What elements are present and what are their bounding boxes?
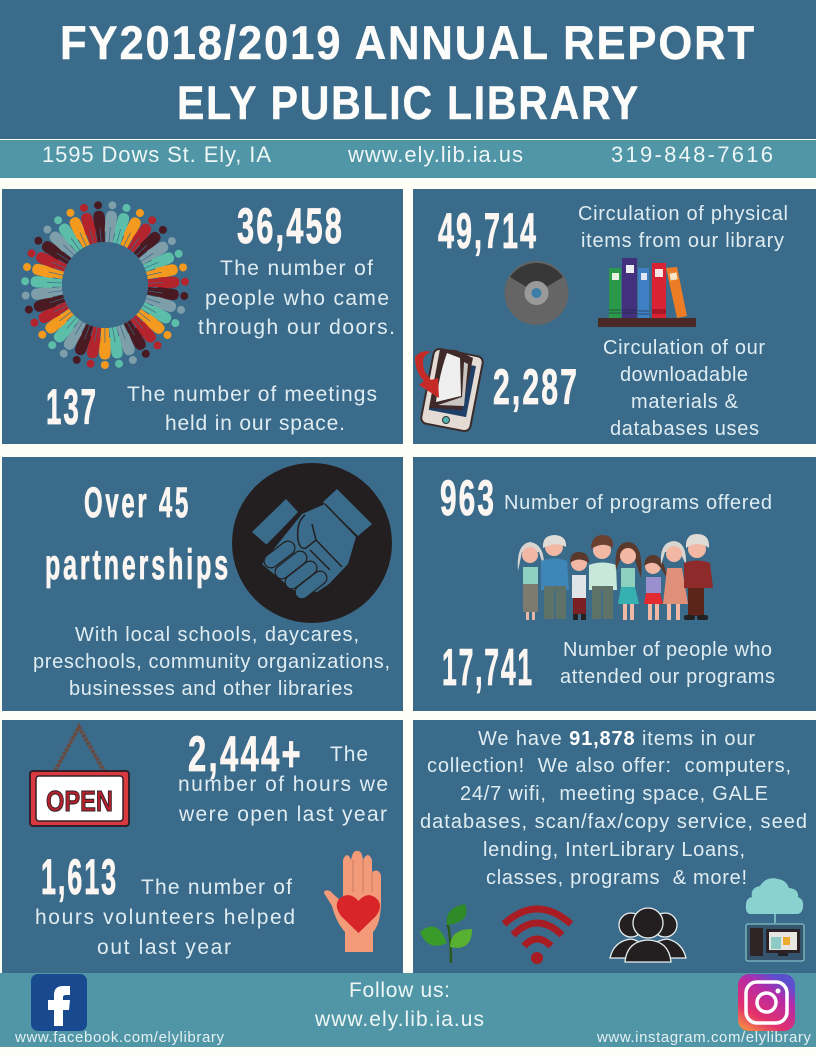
grandfather left	[541, 535, 569, 619]
text: volunteer hours description: The number of	[141, 876, 292, 899]
boy	[570, 552, 589, 620]
text: partnerships description: With local schools, daycares,	[75, 624, 359, 646]
stat: 963: 963	[440, 470, 496, 526]
grandmother right	[661, 541, 688, 620]
text: volunteer hours description: out last year	[97, 936, 231, 959]
text: meetings description: held in our space.	[165, 412, 345, 435]
text: facebook url: www.facebook.com/elylibrary	[14, 1029, 224, 1046]
icon: seedling	[420, 904, 472, 963]
title line 2: ELY PUBLIC LIBRARY	[177, 76, 640, 129]
text: open hours description: The	[330, 743, 368, 766]
heading: Over 45: Over 45	[84, 479, 191, 527]
panel: programs	[413, 457, 816, 711]
text: meetings description: The number of meetings	[127, 383, 377, 406]
text: downloadable description: Circulation of our	[603, 337, 765, 359]
icon: disc	[504, 261, 568, 325]
icon: facebook	[31, 974, 87, 1031]
text: collection description: classes, programs & more!	[486, 867, 747, 889]
text: visitors description: The number of	[220, 257, 373, 280]
icon: group of people	[610, 908, 686, 962]
text: collection description: lending, InterLibrary Loans,	[483, 839, 745, 861]
phone: 319-848-7616	[611, 142, 773, 167]
text: downloadable description: materials &	[631, 391, 739, 413]
mother	[616, 542, 641, 620]
stat: 137: 137	[46, 379, 98, 435]
text: attendance description: attended our programs	[560, 666, 775, 688]
text: volunteer hours description	[35, 876, 295, 959]
stat: 36,458: 36,458	[237, 198, 344, 254]
stat: 49,714: 49,714	[438, 203, 538, 259]
website: www.ely.lib.ia.us	[347, 142, 523, 167]
header banner	[0, 0, 816, 139]
clasped hands	[262, 504, 357, 592]
grandmother left	[518, 542, 544, 620]
text: collection description: We have 91,878 items in our	[478, 728, 755, 750]
icon: handshake	[232, 463, 392, 623]
text: downloadable description: databases uses	[610, 418, 759, 440]
text: physical circulation	[578, 203, 788, 252]
text: visitors description: through our doors.	[198, 316, 395, 339]
text: visitors description: people who came	[205, 287, 389, 310]
icon: instagram	[738, 974, 795, 1031]
icon: open sign: OPEN	[46, 786, 113, 818]
stat: 1,613: 1,613	[41, 849, 118, 905]
text: collection description: collection! We also offer: computers,	[427, 755, 791, 777]
address: 1595 Dows St. Ely, IA	[42, 142, 271, 167]
icon: cloud computer	[746, 878, 804, 961]
icon: family group	[518, 534, 713, 620]
text: visitors description	[198, 257, 395, 339]
text: partnerships description	[33, 624, 390, 700]
father	[589, 535, 617, 619]
text: partnerships description: businesses and other libraries	[69, 678, 353, 700]
text: programs offered: Number of programs offered	[504, 492, 772, 514]
text: follow us: Follow us:	[349, 979, 450, 1002]
panel: visitors and meetings	[2, 189, 403, 444]
text: collection description: databases, scan/fax/copy service, seed	[420, 811, 807, 833]
text: attendance description	[560, 639, 775, 688]
text: attendance description: Number of people who	[563, 639, 772, 661]
panel: hours	[2, 720, 403, 973]
text: downloadable description	[603, 337, 765, 440]
panel: partnerships	[2, 457, 403, 711]
icon: books on shelf	[598, 258, 696, 327]
icon: ring of people	[21, 201, 189, 369]
text: instagram url: www.instagram.com/elylibrary	[596, 1029, 812, 1046]
stat: 17,741: 17,741	[442, 639, 534, 697]
title line 1: FY2018/2019 ANNUAL REPORT	[60, 16, 756, 69]
text: website: www.ely.lib.ia.us	[314, 1008, 484, 1031]
stat: 2,444+: 2,444+	[188, 726, 303, 782]
girl	[644, 555, 668, 620]
footer band	[0, 973, 816, 1047]
text: collection description: 24/7 wifi, meeting space, GALE	[460, 783, 768, 805]
icon: hand with heart	[324, 851, 381, 952]
text: partnerships description: preschools, community organizations,	[33, 651, 390, 673]
text: volunteer hours description: hours volunteers helped	[35, 906, 295, 929]
heading: partnerships: partnerships	[45, 541, 231, 589]
right cuff	[323, 489, 372, 536]
text: downloadable description: downloadable	[620, 364, 748, 386]
text: collection description	[420, 728, 807, 889]
text: physical circulation: items from our library	[581, 230, 784, 252]
text: open hours description: were open last year	[178, 803, 387, 826]
contact band	[0, 140, 816, 178]
icon: wifi	[504, 909, 571, 964]
icon: tablet with book	[415, 348, 484, 432]
grandfather right	[684, 534, 713, 620]
icon: open sign	[30, 727, 129, 826]
text: open hours description	[178, 743, 388, 826]
left cuff	[252, 499, 298, 545]
text: meetings description	[127, 383, 377, 435]
panel: collection and services	[413, 720, 816, 973]
text: physical circulation: Circulation of physical	[578, 203, 788, 225]
stat: 2,287: 2,287	[493, 359, 579, 415]
text: open hours description: number of hours we	[178, 773, 388, 796]
panel: circulation	[413, 189, 816, 444]
